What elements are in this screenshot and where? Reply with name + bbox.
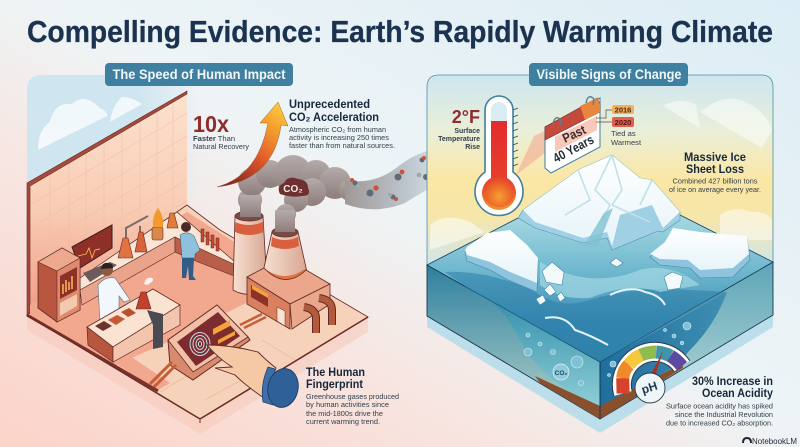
isometric lab wall: [27, 91, 187, 315]
power plant chimneys: [233, 211, 307, 294]
year tags: Tied as: [611, 129, 636, 138]
text: CO2 acceleration: activity is increasing 250 times: [289, 133, 389, 142]
connector thermometer to calendar: [516, 131, 545, 175]
year tags: 2020: [615, 118, 631, 127]
text: ocean acidity: 30% Increase in: [692, 374, 773, 388]
text: CO2 acceleration: [289, 97, 395, 150]
CO2 molecules in the stream: [350, 156, 458, 201]
stat: 2 degrees F: Temperature: [438, 136, 480, 143]
text: ocean acidity: Ocean Acidity: [702, 386, 773, 400]
text: human fingerprint: current warming trend.: [306, 417, 380, 426]
ocean block: [427, 200, 773, 419]
pH gauge: pH: [640, 379, 659, 397]
heading pill: The Speed of Human Impact: [112, 66, 286, 82]
power plant base: [240, 268, 332, 333]
upward arrow: [217, 102, 288, 187]
stat: 2 degrees F: Rise: [465, 144, 480, 151]
CO2 cloud bubble: [279, 178, 309, 197]
fingerprint control panel: [150, 305, 250, 387]
heading pill: Visible Signs of Change: [536, 66, 682, 82]
text: ocean acidity: [666, 374, 773, 428]
text: human fingerprint: Greenhouse gases produced: [306, 392, 399, 401]
text: massive ice sheet loss: [669, 150, 761, 194]
text: massive ice sheet loss: Massive Ice: [684, 150, 746, 164]
floor shadow: [27, 315, 368, 434]
back counter: [80, 212, 242, 305]
text: massive ice sheet loss: Combined 427 billion tons: [672, 176, 758, 186]
text: human fingerprint: The Human: [306, 365, 365, 379]
right ice shelf: [650, 228, 750, 278]
monitor: [72, 225, 117, 282]
CO2 cloud bubble: CO₂: [283, 184, 303, 195]
calendar: Past: [560, 122, 589, 146]
panel: the speed of human impact: [27, 63, 490, 434]
lab flasks and burner: [118, 208, 178, 258]
CO2 bubble: [553, 364, 569, 380]
text: massive ice sheet loss: Sheet Loss: [686, 162, 744, 176]
left ice shelf: [465, 230, 538, 292]
isometric floor: [27, 205, 368, 423]
panel backdrop: [27, 75, 200, 200]
text: human fingerprint: by human activities since: [306, 400, 389, 409]
heading pill: [529, 63, 688, 86]
text: human fingerprint: [306, 365, 399, 426]
scientist at back: [180, 222, 200, 280]
panel: visible signs of change: [427, 63, 773, 433]
calendar: [545, 97, 600, 173]
thermometer: [475, 96, 523, 215]
stat: 2 degrees F: [438, 107, 480, 151]
text: ocean acidity: Surface ocean acidity has spiked: [666, 402, 773, 410]
underwater bubbles: [524, 322, 691, 386]
panel backdrop: [427, 75, 773, 265]
hand pressing panel: [207, 345, 302, 410]
sky clouds: [430, 99, 772, 250]
text: CO2 acceleration: Atmospheric CO₂ from human: [289, 125, 386, 134]
NotebookLM logo: NotebookLM: [752, 436, 797, 446]
year tags: [596, 105, 642, 147]
year tags: 2016: [615, 106, 631, 115]
text: CO2 acceleration: faster than from natural sources.: [289, 141, 395, 150]
floating ice chunks: [536, 258, 683, 305]
heading pill: [105, 63, 293, 86]
stat: 10x: 10x: [193, 111, 229, 137]
calendar: 40 Years: [550, 132, 596, 166]
stat: 10x: Natural Recovery: [193, 142, 249, 151]
text: human fingerprint: Fingerprint: [306, 377, 363, 391]
central iceberg: [518, 155, 680, 250]
text: human fingerprint: the mid-1800s drive the: [306, 409, 383, 418]
text: CO2 acceleration: CO₂ Acceleration: [289, 110, 379, 124]
CO2 bubble: CO₂: [555, 370, 567, 377]
smoke plume: [238, 147, 490, 232]
text: ocean acidity: due to increased CO₂ absorption.: [666, 418, 773, 428]
stat: 2 degrees F: Surface: [454, 128, 480, 135]
stat: 2 degrees F: 2°F: [452, 107, 480, 127]
scientist in lab coat: [98, 263, 130, 322]
work table: [87, 278, 180, 362]
year tags: Warmest: [611, 138, 642, 147]
test tube rack: [201, 229, 219, 251]
wall clouds: [38, 97, 142, 150]
stat: 10x: [193, 111, 249, 151]
text: CO2 acceleration: Unprecedented: [289, 97, 370, 111]
equipment cabinet: [38, 248, 80, 322]
stat: 10x: Faster Than: [193, 134, 235, 143]
text: ocean acidity: since the Industrial Revolution: [675, 410, 773, 419]
text: massive ice sheet loss: of ice on average every year.: [669, 185, 761, 194]
pH gauge: [622, 351, 682, 403]
block shadow: [427, 310, 773, 433]
